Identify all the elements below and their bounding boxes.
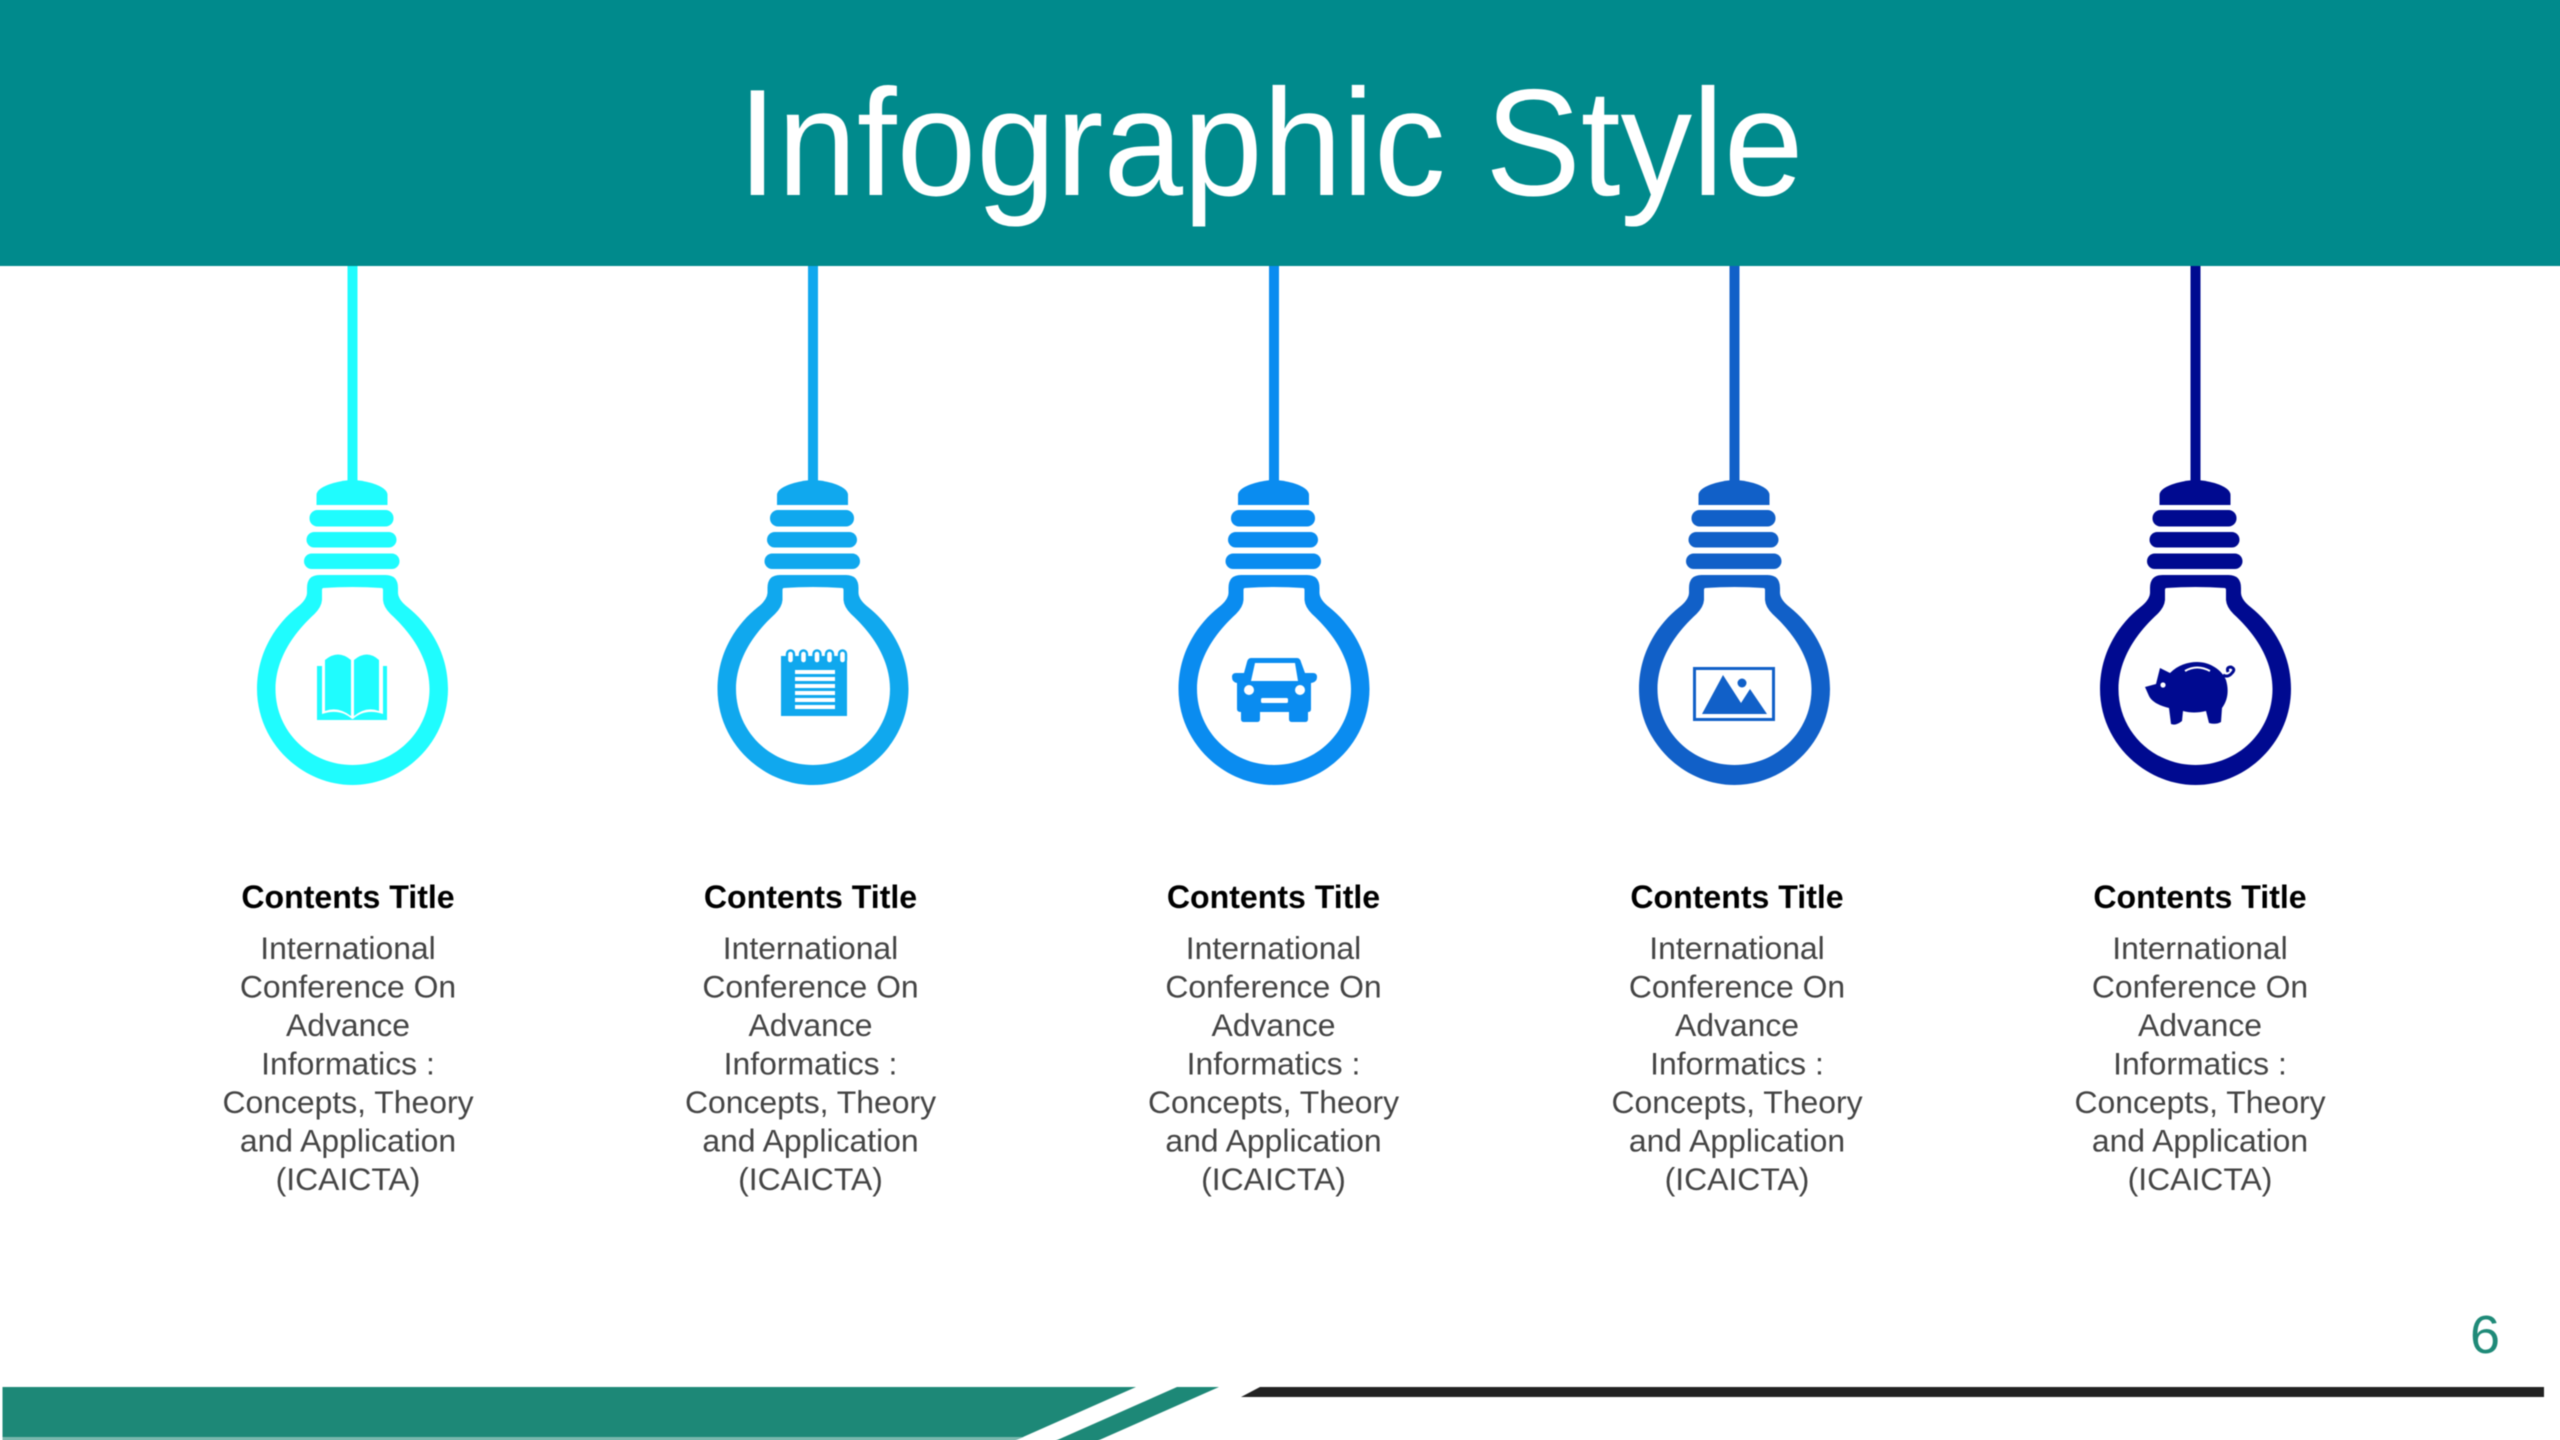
contents text 1: Concepts, Theory bbox=[222, 1084, 474, 1120]
icon: notepad bbox=[781, 650, 847, 716]
contents text 5: International bbox=[2112, 930, 2288, 966]
panel: bulb 1 book bbox=[222, 266, 474, 1197]
contents text 1: Contents Title bbox=[241, 879, 455, 915]
contents text 4: Conference On bbox=[1629, 968, 1845, 1004]
contents text 1: Advance bbox=[286, 1007, 410, 1043]
contents text 3: Contents Title bbox=[1167, 879, 1380, 915]
contents text 2: Concepts, Theory bbox=[685, 1084, 936, 1120]
contents text 5: Informatics : bbox=[2113, 1046, 2287, 1082]
contents text 2: International bbox=[723, 930, 898, 966]
title: Infographic Style bbox=[738, 58, 1803, 228]
contents text 4: Contents Title bbox=[1630, 879, 1844, 915]
contents text 2: Conference On bbox=[702, 968, 919, 1004]
contents text 5: Conference On bbox=[2092, 968, 2308, 1004]
contents text 3 bbox=[1148, 879, 1399, 1197]
contents text 3: Advance bbox=[1211, 1007, 1336, 1043]
contents text 2: Informatics : bbox=[724, 1046, 897, 1082]
bulb 3 bbox=[1178, 266, 1370, 785]
contents text 1: Informatics : bbox=[261, 1046, 435, 1082]
footer line bbox=[1241, 1387, 2544, 1397]
icon: image bbox=[1694, 668, 1774, 720]
contents text 5 bbox=[2074, 879, 2326, 1197]
contents text 2 bbox=[685, 879, 936, 1197]
contents text 3: Conference On bbox=[1165, 968, 1382, 1004]
page number: 6 bbox=[2470, 1305, 2500, 1365]
contents text 1 bbox=[222, 879, 474, 1197]
bulb 4 bbox=[1639, 266, 1830, 785]
contents text 1: Conference On bbox=[240, 968, 456, 1004]
contents text 1: (ICAICTA) bbox=[276, 1161, 420, 1197]
contents text 4: Advance bbox=[1675, 1007, 1799, 1043]
contents text 5: Advance bbox=[2138, 1007, 2262, 1043]
contents text 4 bbox=[1611, 879, 1863, 1197]
contents text 4: (ICAICTA) bbox=[1665, 1161, 1809, 1197]
contents text 4: and Application bbox=[1629, 1122, 1845, 1158]
bulb 2 bbox=[718, 266, 908, 785]
contents text 4: Informatics : bbox=[1650, 1046, 1824, 1082]
contents text 2: and Application bbox=[702, 1122, 919, 1158]
contents text 5: and Application bbox=[2092, 1122, 2308, 1158]
panel: bulb 2 notepad bbox=[685, 266, 936, 1197]
contents text 2: Advance bbox=[748, 1007, 873, 1043]
panel: bulb 4 image bbox=[1611, 266, 1863, 1197]
panel: bulb 3 car bbox=[1148, 266, 1399, 1197]
panel: bulb 5 piggy bank bbox=[2074, 266, 2326, 1197]
icon: car bbox=[1232, 658, 1317, 722]
contents text 2: Contents Title bbox=[704, 879, 917, 915]
contents text 3: Concepts, Theory bbox=[1148, 1084, 1399, 1120]
contents text 3: (ICAICTA) bbox=[1201, 1161, 1346, 1197]
bulb 5 bbox=[2100, 266, 2291, 785]
footer bar bbox=[2, 1387, 1219, 1440]
contents text 3: Informatics : bbox=[1187, 1046, 1360, 1082]
contents text 4: Concepts, Theory bbox=[1611, 1084, 1863, 1120]
contents text 2: (ICAICTA) bbox=[738, 1161, 883, 1197]
contents text 5: Concepts, Theory bbox=[2074, 1084, 2326, 1120]
contents text 3: International bbox=[1186, 930, 1361, 966]
icon: book bbox=[317, 654, 387, 720]
header band bbox=[0, 0, 2560, 266]
contents text 1: and Application bbox=[240, 1122, 456, 1158]
contents text 5: (ICAICTA) bbox=[2128, 1161, 2272, 1197]
contents text 4: International bbox=[1649, 930, 1825, 966]
icon: piggy bank bbox=[2145, 662, 2234, 725]
contents text 5: Contents Title bbox=[2093, 879, 2307, 915]
contents text 3: and Application bbox=[1165, 1122, 1382, 1158]
contents text 1: International bbox=[260, 930, 436, 966]
bulb 1 bbox=[257, 266, 448, 785]
